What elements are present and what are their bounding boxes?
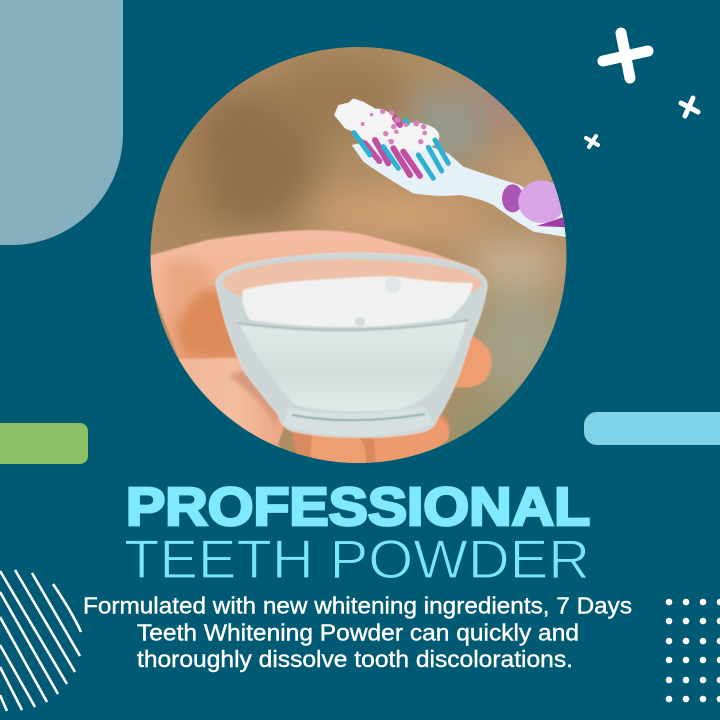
grip — [502, 184, 523, 212]
light blue pill right — [584, 412, 720, 445]
lower fingers — [291, 414, 450, 463]
powder top — [242, 276, 473, 327]
palm shadow — [172, 285, 250, 360]
striped circle decoration — [0, 570, 81, 711]
description text: Teeth Whitening Powder can quickly and — [137, 620, 579, 646]
title line: TEETH POWDER: TEETH POWDER — [124, 528, 590, 590]
photo: toothbrush over bowl of powder — [150, 47, 566, 463]
description text — [83, 592, 632, 672]
bowl body — [216, 253, 487, 437]
glass bowl — [216, 253, 487, 437]
powder on bristles — [334, 98, 439, 151]
description text: thoroughly dissolve tooth discolorations. — [137, 646, 573, 672]
green pill left — [0, 423, 88, 464]
right finger — [454, 336, 493, 388]
toothbrush — [334, 98, 568, 237]
glass base — [284, 406, 434, 436]
pink speckles — [361, 109, 427, 144]
hand — [130, 230, 492, 470]
pale blue rounded panel top left — [0, 0, 123, 245]
brush handle — [352, 141, 568, 237]
thumb — [178, 358, 284, 449]
icon: sparkle crosses — [586, 33, 698, 147]
title — [124, 477, 590, 590]
description text: Formulated with new whitening ingredients, 7 Days — [83, 592, 632, 618]
dot grid decoration — [666, 599, 720, 702]
powder body — [240, 322, 466, 411]
bristles — [354, 118, 448, 178]
photo background blur — [140, 40, 580, 470]
see-through rim — [222, 258, 482, 297]
back of hand — [150, 229, 480, 362]
title line: PROFESSIONAL: PROFESSIONAL — [126, 477, 590, 537]
